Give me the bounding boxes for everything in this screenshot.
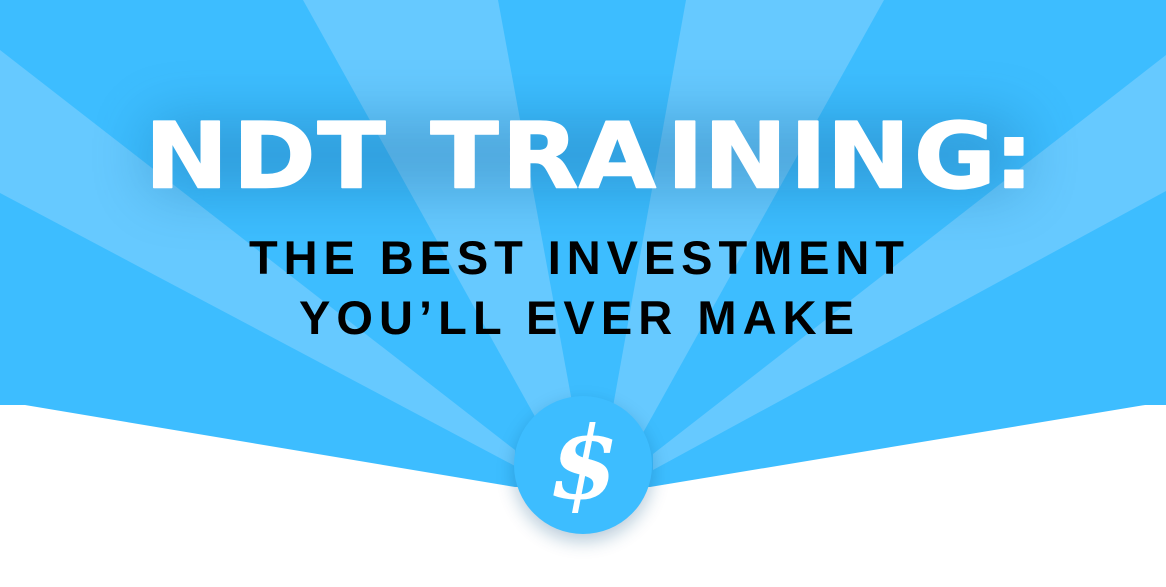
title shadow (150, 120, 1020, 190)
subtitle: YOU’LL EVER MAKE (299, 291, 854, 344)
title: NDT TRAINING: (145, 103, 1034, 209)
icon: dollar coin (514, 396, 652, 541)
icon: dollar coin: $ (549, 404, 619, 522)
white lower band (0, 405, 1166, 587)
subtitle (249, 231, 904, 344)
subtitle: THE BEST INVESTMENT (249, 231, 904, 284)
